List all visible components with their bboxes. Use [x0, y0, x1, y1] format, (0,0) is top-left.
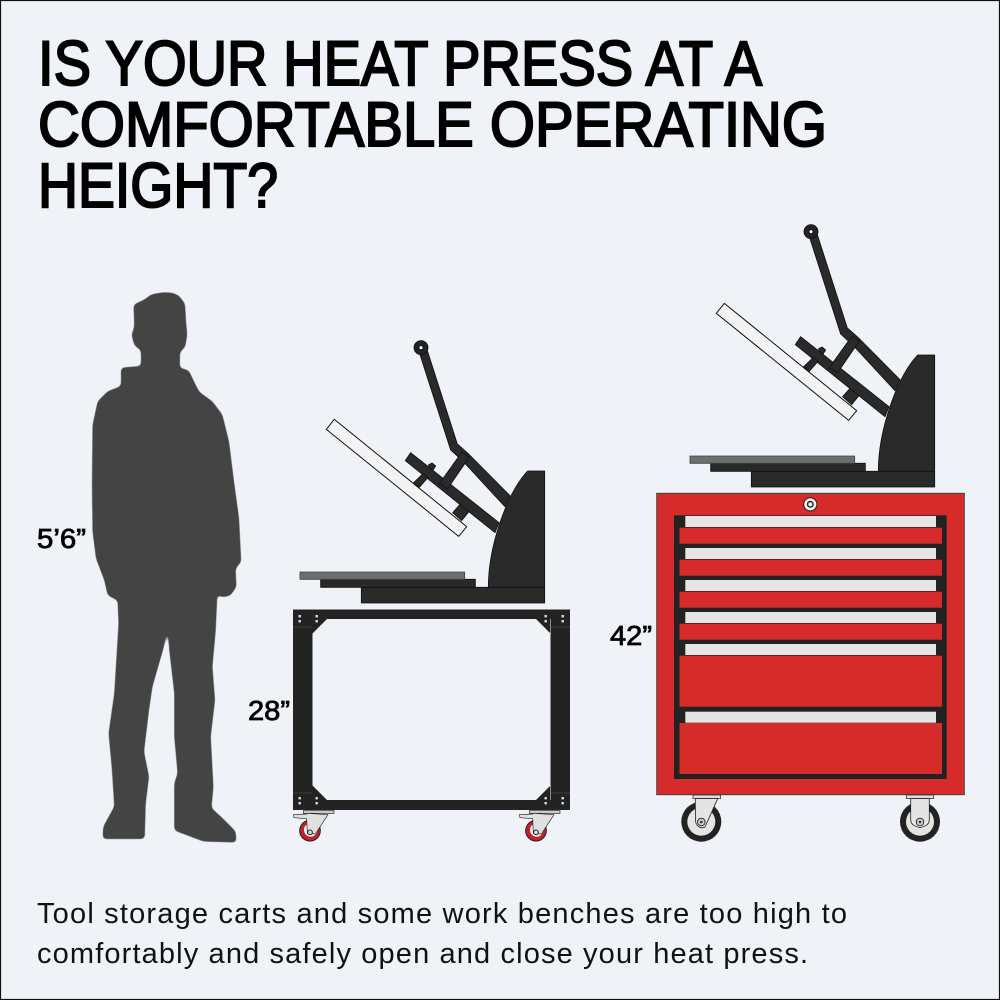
drawer 4 — [680, 612, 942, 640]
cart caster right — [900, 795, 940, 842]
title: HEIGHT? — [38, 151, 278, 221]
drawer 3 — [680, 580, 942, 608]
work bench — [293, 610, 570, 810]
tool cart — [657, 493, 964, 795]
heat press on work bench — [300, 341, 545, 603]
label: cart height: 42” — [610, 620, 652, 651]
label: person height: 5’6” — [37, 523, 86, 554]
label: bench height: 28” — [248, 695, 290, 726]
person silhouette — [93, 293, 240, 842]
drawer 5 — [680, 644, 942, 707]
drawer 2 — [680, 548, 942, 576]
cart caster left — [681, 795, 721, 842]
lock — [804, 498, 817, 511]
drawer 6 — [680, 712, 942, 774]
bench caster right — [519, 811, 560, 841]
heat press on tool cart — [690, 225, 935, 487]
title — [38, 29, 827, 221]
body text — [37, 898, 847, 970]
body text: comfortably and safely open and close your heat press. — [37, 938, 808, 970]
body text: Tool storage carts and some work benches are too high to — [37, 898, 847, 930]
bench caster left — [293, 811, 334, 841]
title: IS YOUR HEAT PRESS AT A — [38, 29, 762, 99]
title: COMFORTABLE OPERATING — [38, 90, 827, 160]
drawer 1 — [680, 516, 942, 544]
